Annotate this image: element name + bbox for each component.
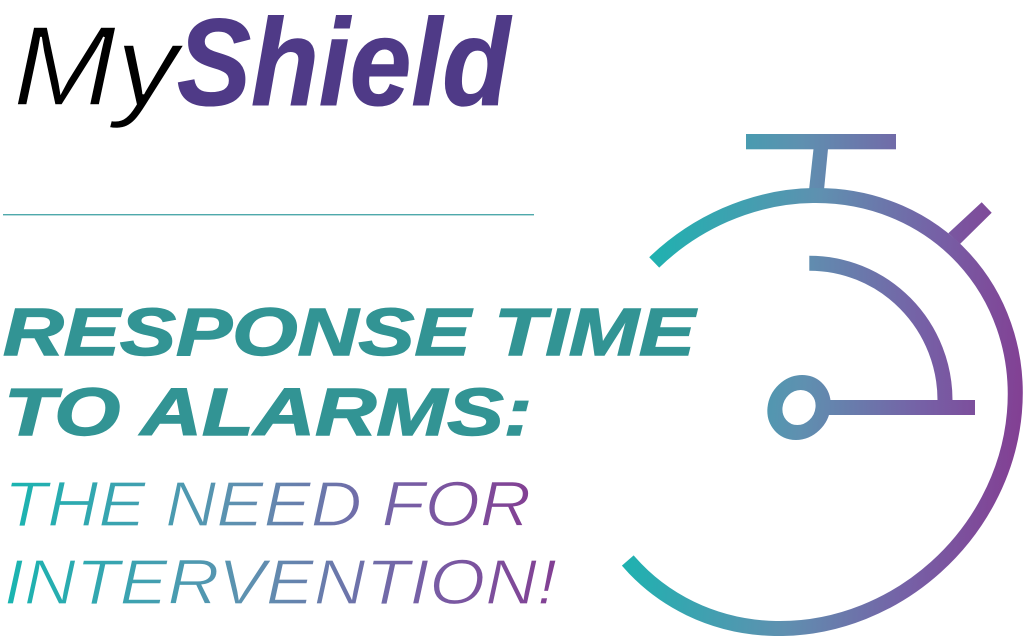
- logo word: My: My: [13, 3, 185, 129]
- subheading line 1: THE NEED FOR: [4, 468, 531, 540]
- stopwatch inner arc: [809, 263, 945, 400]
- stopwatch hand: [826, 400, 975, 415]
- subheading: the need for intervention: [4, 468, 557, 618]
- stopwatch top bar: [746, 134, 896, 149]
- stopwatch outer ring: [622, 196, 1024, 629]
- stopwatch hub: [773, 382, 825, 432]
- heading line 1: RESPONSE TIME: [3, 295, 698, 370]
- subheading line 2: INTERVENTION!: [4, 546, 557, 618]
- logo: MyShield: [13, 0, 513, 132]
- teal divider line: [3, 214, 534, 215]
- stopwatch side button: [948, 202, 992, 244]
- stopwatch stem: [809, 149, 828, 190]
- heading line 2: TO ALARMS:: [4, 375, 532, 450]
- icon: stopwatch: [622, 134, 1024, 629]
- heading: response time to alarms: [3, 295, 698, 450]
